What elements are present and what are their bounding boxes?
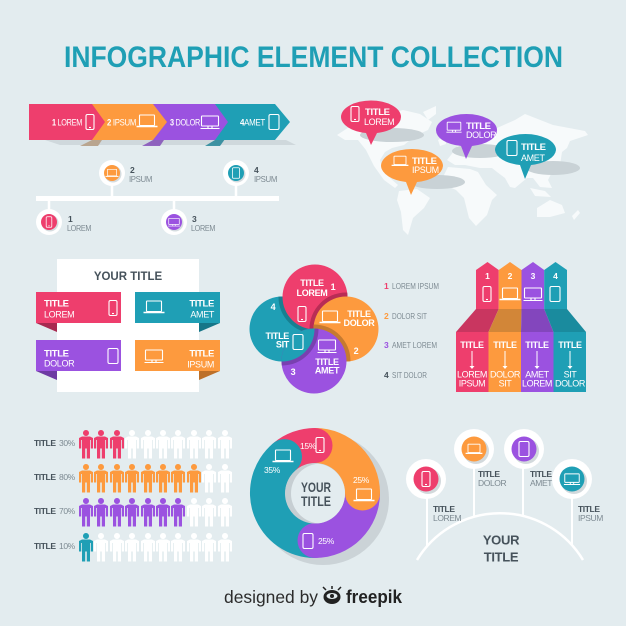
- ribbon: dolor: DOLOR: [44, 358, 75, 368]
- legend list: SIT DOLOR: [392, 370, 427, 380]
- bubble: ipsum: IPSUM: [412, 165, 439, 175]
- row: 10%: 10%: [59, 541, 76, 551]
- pin: ipsum: IPSUM: [578, 513, 603, 523]
- pin: amet: TITLE: [530, 469, 552, 479]
- row: 80%: 80%: [59, 472, 76, 482]
- lower columns: [456, 332, 586, 392]
- panel heading: YOUR TITLE: [94, 271, 163, 283]
- row: 10%: [34, 533, 232, 562]
- pin: lorem: LOREM: [433, 513, 462, 523]
- segment labels: 2: [354, 346, 359, 356]
- segment icons: [293, 306, 340, 352]
- donut labels: [264, 441, 370, 546]
- milestone 2: 2: [130, 165, 135, 175]
- row: 30%: 30%: [59, 438, 76, 448]
- segment labels: 1: [331, 282, 336, 292]
- title: INFOGRAPHIC ELEMENT COLLECTION: [64, 41, 563, 74]
- bubble: dolor: [436, 114, 497, 159]
- step 2 orange: 2 IPSUM: [107, 118, 136, 128]
- segment labels: [266, 278, 375, 377]
- ribbon: dolor: TITLE: [44, 348, 69, 360]
- milestone 1: [36, 209, 91, 235]
- milestone 2: IPSUM: [129, 174, 152, 184]
- arc title: YOUR: [483, 532, 520, 548]
- pin: lorem: TITLE: [433, 504, 455, 514]
- segment labels: 3: [291, 367, 296, 377]
- pin: lorem: [406, 459, 462, 523]
- ribbon: dolor: [36, 340, 121, 380]
- pin: amet: AMET: [530, 478, 552, 488]
- map landmasses: [337, 106, 588, 235]
- segment labels: TITLE: [266, 331, 289, 341]
- panel: ribbon cards: [36, 259, 220, 392]
- row: 30%: TITLE: [34, 438, 56, 448]
- bubble: lorem: TITLE: [365, 107, 390, 118]
- donut labels: 25%: [353, 475, 370, 485]
- ribbon: ipsum: TITLE: [189, 348, 214, 360]
- arc title: TITLE: [484, 550, 519, 564]
- lower columns: TITLE: [493, 340, 517, 350]
- row: 80%: TITLE: [34, 472, 56, 482]
- milestone 3: [161, 209, 215, 235]
- legend list: 4: [384, 370, 389, 380]
- segment labels: LOREM: [296, 288, 328, 298]
- footer credit: [224, 586, 403, 607]
- ribbon: ipsum: IPSUM: [187, 360, 214, 370]
- panel: column arrows: [456, 262, 586, 392]
- panel: people pictogram: [34, 430, 232, 562]
- bubble: ipsum: TITLE: [412, 156, 437, 167]
- centre title: [301, 479, 331, 509]
- segment labels: DOLOR: [344, 318, 375, 328]
- donut labels: 35%: [264, 465, 281, 475]
- milestone 4: [223, 160, 277, 186]
- segment labels: SIT: [276, 340, 290, 350]
- upper arrows: [476, 262, 567, 309]
- bubble: dolor: TITLE: [466, 121, 491, 132]
- pin: ipsum: TITLE: [578, 504, 600, 514]
- bubble: amet: AMET: [521, 153, 545, 163]
- step 4 teal: 4AMET: [240, 118, 266, 128]
- row: 70%: TITLE: [34, 506, 56, 516]
- bubble: ipsum: [381, 149, 443, 195]
- legend list: 2: [384, 311, 389, 321]
- centre title: TITLE: [301, 493, 331, 509]
- legend list: [384, 281, 439, 380]
- bubble: lorem: [341, 101, 401, 145]
- panel: arrow process strip: [29, 104, 296, 146]
- donut labels: 25%: [318, 536, 335, 546]
- segment labels: TITLE: [300, 278, 324, 288]
- pin: dolor: TITLE: [478, 469, 500, 479]
- milestone 1: 1: [68, 214, 73, 224]
- slanted folds: [456, 309, 586, 332]
- donut hole: [285, 464, 351, 524]
- lower columns: SIT: [564, 370, 577, 380]
- pin: amet: [504, 429, 552, 488]
- ribbon: lorem: [36, 292, 121, 332]
- panel: world map: [337, 101, 588, 235]
- icon: freepik bee: [323, 586, 341, 604]
- ring segments: [250, 428, 380, 558]
- upper arrows: 4: [553, 271, 558, 281]
- upper arrows: 1: [485, 271, 490, 281]
- row: 80%: [34, 464, 232, 492]
- panel: arc pins: [406, 429, 603, 564]
- lower columns: TITLE: [525, 340, 549, 350]
- pin: dolor: [454, 429, 506, 488]
- donut labels: 15%: [300, 441, 317, 451]
- ribbon: amet: TITLE: [189, 298, 214, 310]
- bubble: dolor: DOLOR: [466, 130, 497, 140]
- lower columns: TITLE: [460, 340, 484, 350]
- step 3 purple: 3 DOLOR: [170, 118, 201, 128]
- panel: timeline: [36, 160, 279, 235]
- milestone 3: LOREM: [191, 223, 215, 233]
- ribbon: lorem: TITLE: [44, 298, 69, 310]
- ribbon: lorem: LOREM: [44, 310, 74, 320]
- upper arrows: 3: [531, 271, 536, 281]
- arc title: [483, 532, 520, 564]
- step 4 teal: [205, 104, 290, 140]
- lower columns: LOREM: [522, 378, 552, 388]
- row: 30%: [34, 430, 232, 458]
- centre title: YOUR: [301, 479, 331, 495]
- milestone 4: 4: [254, 165, 259, 175]
- milestone 4: IPSUM: [254, 174, 277, 184]
- segment labels: TITLE: [347, 309, 371, 319]
- bubble: lorem: LOREM: [364, 117, 394, 127]
- row: 10%: TITLE: [34, 541, 56, 551]
- step 3 purple: [150, 104, 228, 140]
- ribbon: ipsum: [135, 340, 220, 380]
- legend list: DOLOR SIT: [392, 311, 427, 321]
- row: 70%: [34, 498, 232, 526]
- milestone 2: [99, 160, 152, 186]
- upper arrows: 2: [508, 271, 513, 281]
- milestone 1: LOREM: [67, 223, 91, 233]
- legend list: 3: [384, 340, 389, 350]
- panel: pinwheel venn: [250, 264, 378, 394]
- pin: ipsum: [552, 459, 603, 523]
- segment labels: 4: [271, 302, 276, 312]
- step 2 orange: [88, 104, 167, 140]
- bubble: amet: TITLE: [521, 142, 546, 153]
- footer credit: freepik: [346, 587, 403, 607]
- milestone 3: 3: [192, 214, 197, 224]
- bubble: amet: [495, 134, 556, 179]
- ribbon: amet: AMET: [190, 310, 215, 320]
- ribbon: amet: [135, 292, 220, 332]
- legend list: 1: [384, 281, 389, 291]
- lower columns: TITLE: [558, 340, 582, 350]
- row: 70%: 70%: [59, 506, 76, 516]
- segment labels: TITLE: [315, 357, 339, 367]
- segment labels: AMET: [315, 366, 340, 376]
- step 1 pink: [29, 104, 105, 140]
- legend list: AMET LOREM: [392, 340, 437, 350]
- lower columns: AMET: [525, 370, 550, 380]
- legend list: LOREM IPSUM: [392, 281, 439, 291]
- step 1 pink: 1 LOREM: [52, 118, 82, 128]
- bubble shadows: [360, 128, 580, 189]
- lower columns: DOLOR: [555, 378, 586, 388]
- lower columns: IPSUM: [459, 378, 485, 388]
- panel: donut chart: [250, 428, 389, 565]
- footer credit: designed by: [224, 587, 318, 607]
- lower columns: DOLOR: [490, 370, 521, 380]
- lower columns: LOREM: [457, 370, 487, 380]
- lower columns: SIT: [499, 378, 512, 388]
- pin: dolor: DOLOR: [478, 478, 506, 488]
- donut icons: [272, 438, 374, 548]
